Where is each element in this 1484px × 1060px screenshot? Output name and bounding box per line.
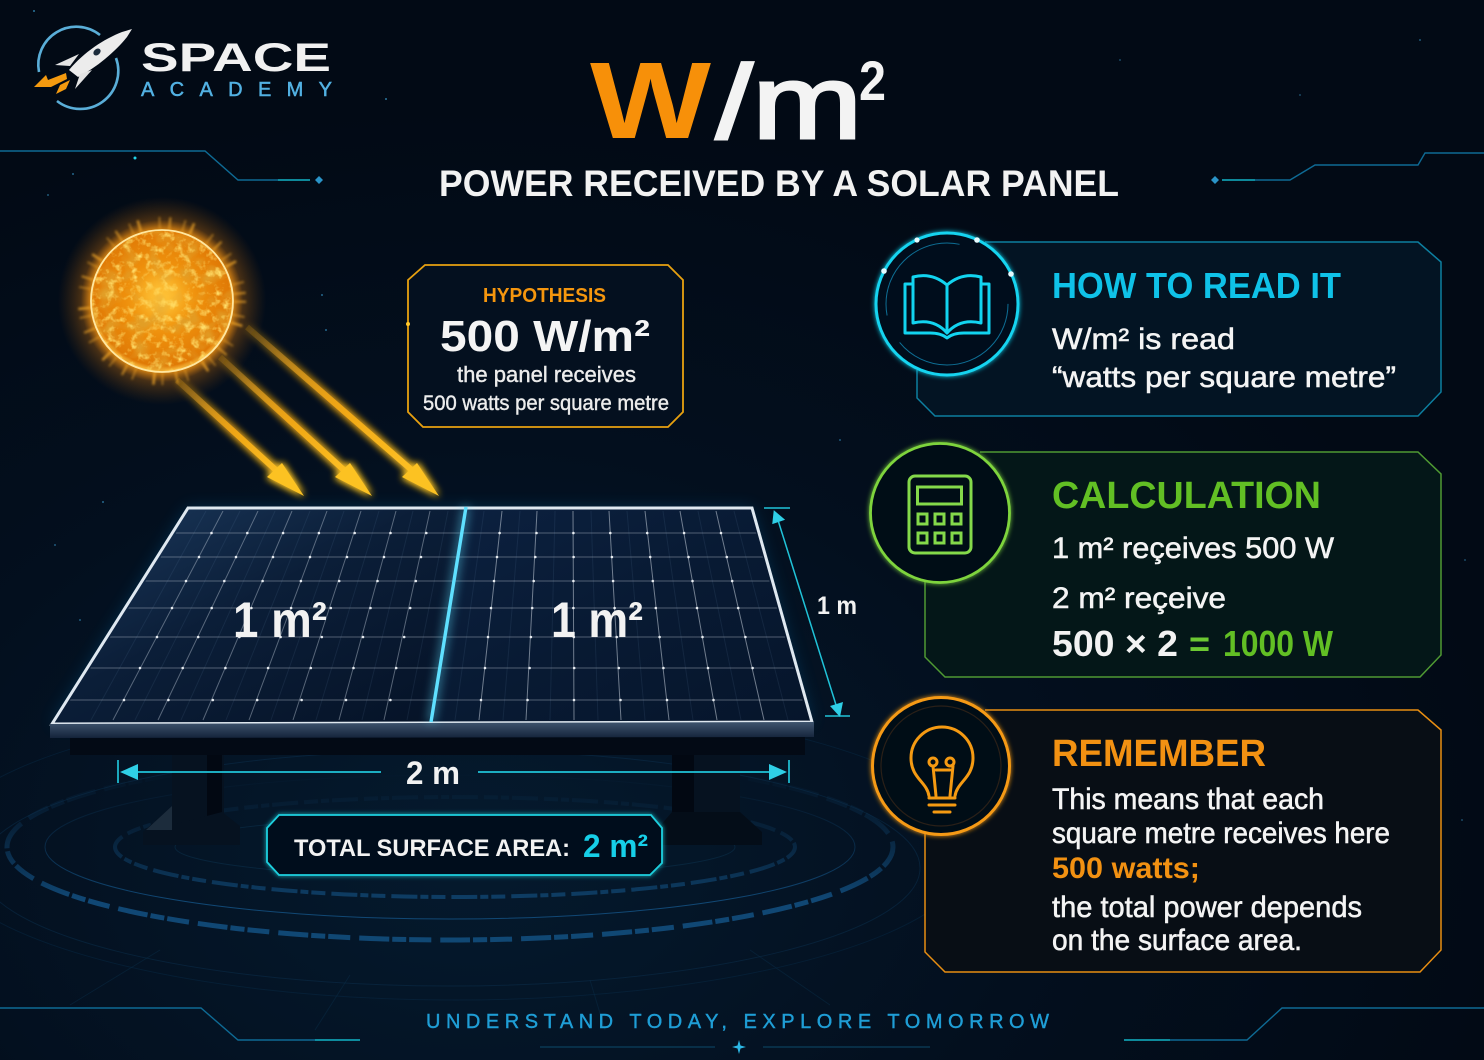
body text	[1052, 323, 1396, 394]
label: left 1 m2: 1 m²	[233, 592, 327, 648]
body text: square metre receives here	[1052, 817, 1390, 850]
callout: hypothesis	[406, 265, 683, 427]
title: /m	[716, 45, 862, 161]
panel: how to read it	[876, 233, 1441, 416]
title: 2	[859, 49, 886, 112]
icon: sun	[58, 197, 266, 405]
panel grid	[67, 511, 806, 720]
top right decorative line	[1211, 153, 1484, 184]
grid node dots	[124, 533, 760, 700]
dimension: 1 m: 1 m	[817, 592, 857, 620]
top left decorative line	[0, 151, 323, 184]
panel front edge	[50, 722, 814, 738]
tagline: UNDERSTAND TODAY, EXPLORE TOMORROW	[426, 1011, 1049, 1033]
formula	[1052, 623, 1333, 664]
panel frame	[52, 508, 812, 724]
body text	[1052, 532, 1335, 615]
bottom left decorative line	[0, 1008, 360, 1040]
panel left half face	[52, 508, 466, 724]
icon: calculator	[870, 444, 1010, 582]
panel: remember	[872, 698, 1441, 972]
column lines	[113, 511, 430, 720]
hypothesis text: the panel receives	[457, 362, 636, 387]
formula: 1000 W	[1223, 623, 1333, 664]
dimension: 2 m: 2 m	[406, 755, 460, 791]
body text: “watts per square metre”	[1052, 361, 1396, 394]
card frame	[925, 452, 1441, 677]
callout: total surface area	[267, 815, 662, 875]
sun ray arrows	[177, 327, 439, 496]
subtitle: POWER RECEIVED BY A SOLAR PANEL	[439, 163, 1119, 204]
heading: REMEMBER	[1052, 733, 1266, 775]
solar panel	[50, 507, 814, 845]
body text: W/m² is read	[1052, 323, 1235, 356]
hypothesis label: HYPOTHESIS	[483, 285, 606, 307]
wordmark space: SPACE	[141, 36, 331, 80]
arrow 2	[220, 357, 372, 496]
hypothesis value: 500 W/m²	[440, 312, 650, 361]
icon: rocket	[34, 27, 132, 109]
arrow 1	[177, 380, 304, 496]
starfield	[33, 10, 1466, 821]
total value: 2 m²	[583, 828, 648, 864]
heading: CALCULATION	[1052, 475, 1321, 517]
hypothesis text: 500 watts per square metre	[423, 392, 669, 415]
card frame	[917, 242, 1441, 416]
body text: 1 m² reçeives 500 W	[1052, 532, 1335, 565]
title	[590, 40, 886, 162]
panel: calculation	[870, 444, 1441, 677]
icon: light bulb	[872, 698, 1010, 834]
body text: on the surface area.	[1052, 924, 1302, 957]
body text: 500 watts;	[1052, 852, 1200, 885]
body text	[1052, 783, 1390, 957]
arrow 3	[247, 327, 439, 496]
total label: TOTAL SURFACE AREA:	[294, 835, 570, 862]
row lines	[67, 533, 806, 700]
heading: HOW TO READ IT	[1052, 265, 1341, 306]
panel under shadow	[70, 737, 805, 755]
wordmark academy: ACADEMY	[141, 79, 332, 101]
card frame	[925, 710, 1441, 972]
body text: the total power depends	[1052, 891, 1362, 924]
panel legs	[143, 745, 762, 845]
formula: 500 × 2	[1052, 623, 1178, 664]
hypothesis text	[423, 362, 669, 415]
formula: =	[1189, 623, 1210, 664]
logo: space academy	[34, 27, 332, 109]
footer star ornament	[540, 1040, 930, 1054]
panel right half face	[431, 508, 812, 722]
title: W	[590, 40, 711, 162]
ground hud rings	[0, 700, 975, 1030]
panel glow	[52, 508, 812, 724]
body text: This means that each	[1052, 783, 1324, 816]
icon: book	[876, 233, 1018, 375]
panel divider	[431, 507, 466, 722]
streaks	[91, 511, 788, 720]
label: right 1 m2: 1 m²	[551, 592, 643, 648]
dimension: 1 m	[764, 508, 857, 717]
body text: 2 m² reçeive	[1052, 582, 1226, 615]
dimension: 2 m	[118, 755, 789, 791]
bottom right decorative line	[1124, 1008, 1484, 1040]
